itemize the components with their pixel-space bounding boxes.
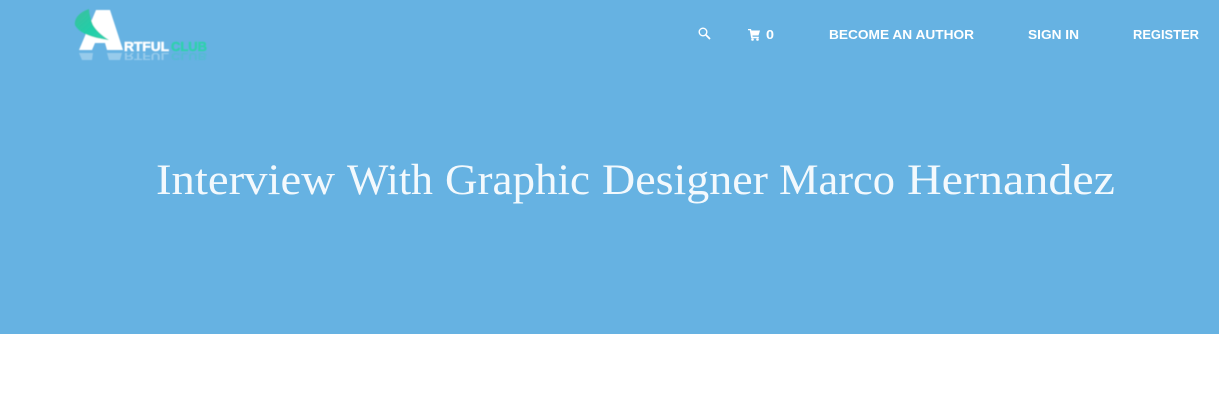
logo wordmark: RTFUL <box>124 40 169 54</box>
logo letter A <box>79 10 123 50</box>
cart count: 0 <box>766 28 774 42</box>
title: With <box>347 157 433 204</box>
blue hero banner <box>0 0 1219 334</box>
nav link: sign in: SIGN IN <box>1028 28 1079 42</box>
logo reflection <box>79 50 207 61</box>
logo reflection: RTFUL <box>124 50 169 61</box>
nav link: register: REGISTER <box>1133 28 1199 42</box>
logo: Artful Club <box>75 9 207 61</box>
title: Hernandez <box>907 157 1115 204</box>
logo reflection: CLUB <box>171 50 207 61</box>
title: Graphic <box>445 157 590 204</box>
title: Designer <box>602 157 768 204</box>
icon: search <box>699 28 710 39</box>
icon: shopping cart <box>748 29 760 41</box>
nav link: become an author: BECOME AN AUTHOR <box>829 28 974 42</box>
title: Interview <box>156 157 335 204</box>
logo wordmark: CLUB <box>171 40 207 54</box>
logo green leaf <box>75 9 109 40</box>
title: Marco <box>779 157 895 204</box>
